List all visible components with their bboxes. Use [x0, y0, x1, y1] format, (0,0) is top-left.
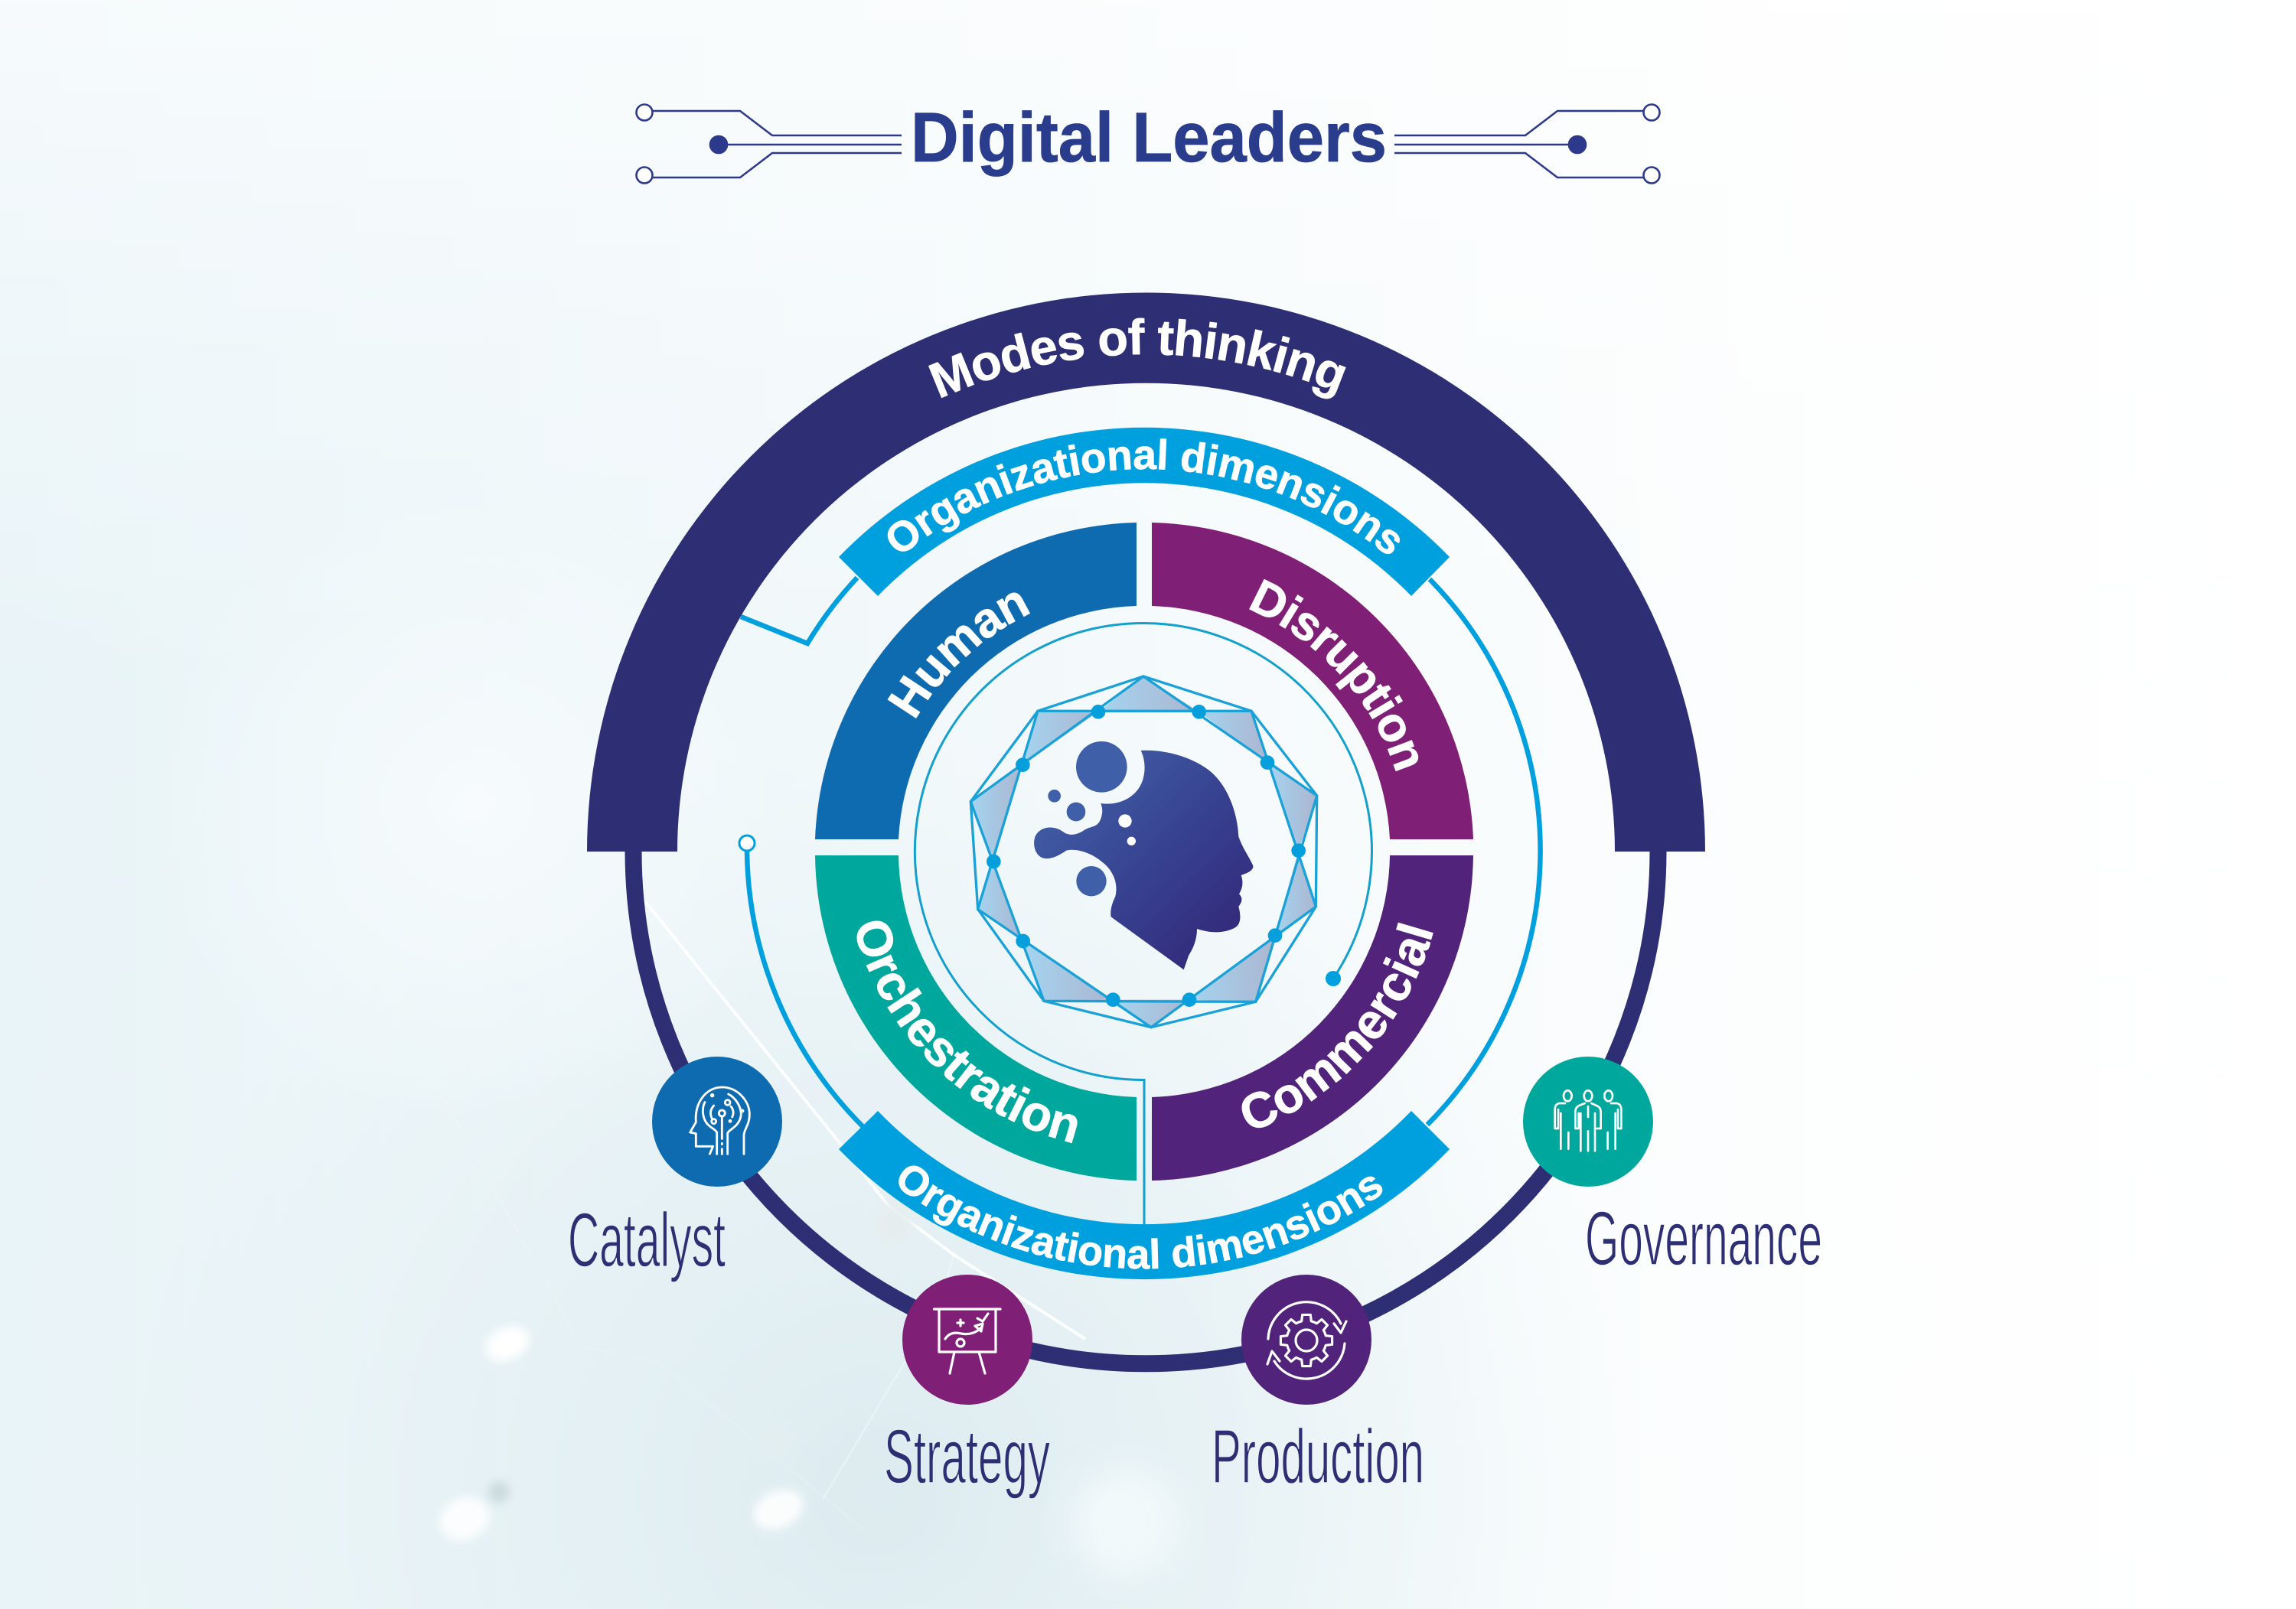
segment: Human [815, 523, 1137, 839]
label: Governance: Governance [1585, 1196, 1822, 1282]
node: Governance [1523, 1057, 1653, 1187]
node: Strategy [902, 1275, 1032, 1405]
band label top: Organizational dimensions [888, 438, 1400, 554]
head highlights [1118, 814, 1136, 845]
icon: strategy board [934, 1309, 1000, 1373]
band: organizational dimensions top [839, 427, 1450, 596]
Human label: Human [888, 592, 1030, 718]
head silhouette [1034, 751, 1253, 969]
decagon nodes [987, 705, 1306, 1007]
connector: left blue arc with node [739, 835, 863, 1126]
decagon shaded triangles [970, 676, 1317, 1028]
lower ring [634, 852, 1658, 1363]
icon: three people [1555, 1090, 1621, 1151]
circuit ornament: right [1394, 104, 1659, 184]
node: Production [1241, 1275, 1371, 1405]
Orchestration label: Orchestration [857, 921, 1078, 1143]
band label bottom: Organizational dimensions [899, 1166, 1382, 1269]
Disruption label: Disruption [1249, 578, 1419, 771]
decagon lines [970, 676, 1317, 1028]
connector: upper-left blue line [741, 578, 857, 643]
Commercial label: Commercial [1241, 923, 1433, 1128]
title: Digital Leaders [911, 99, 1387, 177]
segment: Orchestration [815, 855, 1137, 1181]
label: Catalyst: Catalyst [568, 1197, 726, 1283]
band: organizational dimensions bottom [839, 1111, 1450, 1279]
icon: AI head [690, 1087, 749, 1154]
icon: gear with cycle arrows [1267, 1302, 1346, 1379]
segment: Disruption [1152, 523, 1473, 839]
panel: modes of thinking arch [587, 292, 1705, 852]
connector: right blue arc [1427, 579, 1541, 1125]
arch label: Modes of thinking [928, 318, 1346, 399]
segment: Commercial [1152, 855, 1473, 1181]
centre emblem: decagon star and head [970, 676, 1317, 1028]
connector: thin inner circle with dot and stem [915, 624, 1371, 1226]
circuit ornament: left [637, 104, 902, 184]
node: Catalyst [652, 1057, 782, 1187]
label: Production: Production [1212, 1414, 1424, 1500]
label: Strategy: Strategy [884, 1414, 1050, 1500]
head bubbles [1048, 741, 1127, 896]
